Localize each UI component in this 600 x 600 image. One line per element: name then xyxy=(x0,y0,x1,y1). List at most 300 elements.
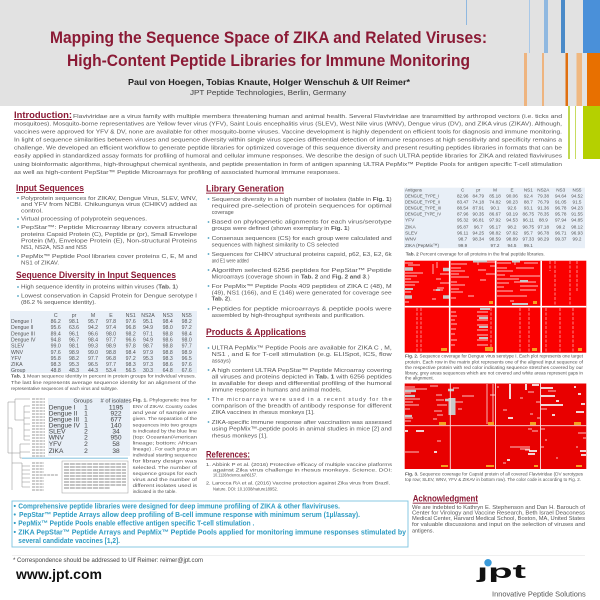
table 1: sequence identity: 98.0 xyxy=(182,338,192,344)
figure 1 caption: lineage; bottom: African xyxy=(133,441,197,447)
callout: conclusions: • xyxy=(14,501,16,510)
figure 1 caption: individual starting sequence xyxy=(133,453,197,459)
panel: library generation: (49), NS1 (166), and E (146) were generated for coverage see xyxy=(212,290,392,296)
table 2: percent coverage: 88.54 xyxy=(457,206,469,211)
table 1: sequence identity: 98.0 xyxy=(106,331,116,337)
figure 2 caption: the alignment. xyxy=(405,376,434,382)
table 1: sequence identity: Group xyxy=(11,368,26,374)
title xyxy=(50,29,487,70)
table 2: percent coverage: 94.64 xyxy=(555,193,567,198)
table 1: sequence identity: 98.8 xyxy=(163,344,173,350)
figure 1 caption: given. The separation of the xyxy=(133,416,197,422)
table: groups and isolates: Dengue III xyxy=(49,416,79,423)
table: groups and isolates: 34 xyxy=(112,428,120,435)
table: groups and isolates: 1 xyxy=(84,422,88,429)
table 1: sequence identity: M xyxy=(91,313,95,319)
table 1: sequence identity: NS5 xyxy=(182,313,192,319)
table 2: percent coverage: 98.59 xyxy=(489,236,501,241)
panel: products and applications: ZIKA-specific immune response after vaccination was assessed xyxy=(212,420,392,426)
table 1: sequence identity: 89.4 xyxy=(51,331,61,337)
panel: library generation: Algorithm selected 6256 peptides for PepStar™ Peptide xyxy=(212,268,392,274)
panel: library generation: Sequences for CHIKV structural proteins capsid, p62, E3, E2, 6k xyxy=(212,252,392,258)
table 1: sequence identity: 98.9 xyxy=(106,344,116,350)
table 2: percent coverage: E xyxy=(510,187,514,192)
table 1: sequence identity: 64.8 xyxy=(163,368,173,374)
figure 1 caption: for library design was xyxy=(133,459,198,465)
introduction: as well as high-content PepStar™ Peptide Microarrays for profiling of associated humoral immune responses. xyxy=(14,170,340,176)
table 1: sequence identity: 95.3 xyxy=(69,362,79,368)
panel: library generation: Tab. 2). xyxy=(212,297,232,303)
table 2: percent coverage: Antigens xyxy=(405,187,423,193)
table 2: percent coverage xyxy=(404,187,585,249)
figure 1 caption: lineage) . For each group an xyxy=(133,447,197,453)
panel: products and applications: rhesus monkeys [1]. xyxy=(212,433,268,439)
table 1 caption: Tab. 1 Mean sequence identity in percent in protein groups for individual viruses. xyxy=(11,374,196,380)
table 2: percent coverage: 93.1 xyxy=(524,206,533,211)
panel: input sequences: Virtual processing of polyprotein sequences. xyxy=(21,217,148,223)
table 1: sequence identity: 53.4 xyxy=(106,368,116,374)
table 2: percent coverage: 95.78 xyxy=(555,212,567,217)
table 1: sequence identity: 96.5 xyxy=(182,356,192,362)
table 1: sequence identity: 99.0 xyxy=(51,344,61,350)
table 1: sequence identity: 99.3 xyxy=(88,344,98,350)
table: groups and isolates: 2 xyxy=(84,434,88,441)
table 2: percent coverage: 96.78 xyxy=(538,230,549,235)
table 1: sequence identity: WNV xyxy=(11,350,24,356)
table 2: percent coverage: 90.06 xyxy=(506,193,518,198)
table 1: sequence identity: 96.8 xyxy=(106,356,116,362)
panel: acknowledgment: for valuable discussions and input on the selection of viruses and xyxy=(412,522,585,528)
table 1: sequence identity: 97.2 xyxy=(126,356,136,362)
panel: acknowledgment: We are indebted to Kathryn E. Stephenson and Dan H. Barouch of xyxy=(412,505,585,511)
tree legend box xyxy=(62,461,128,493)
table 2: percent coverage: 90.1 xyxy=(491,206,500,211)
table 2: percent coverage: 98.12 xyxy=(571,224,583,229)
table: groups and isolates xyxy=(48,398,132,456)
figure 3 caption: top row; SLEV, WNV, YFV & ZIKAV in bottom row). The color code is according to Fig. 2. xyxy=(405,477,581,483)
panel: references: 1. Abbink P et al. (2016) Protective efficacy of multiple vaccine platforms xyxy=(206,462,393,468)
table: groups and isolates: ZIKA xyxy=(49,448,64,455)
table 2: percent coverage: 99.2 xyxy=(573,236,582,241)
introduction: using bioinformatic algorithms, high-throughput chemical synthesis, and peptide presentation in form of antigen spanning ULTRA PepMix™ Peptide Pools for antigen specific T-cell stimulation xyxy=(14,162,562,168)
panel: acknowledgment xyxy=(412,494,585,534)
panel: input sequences: PepStar™: Peptide Microarray library covers structural xyxy=(21,225,197,231)
table: groups and isolates: # of isolates xyxy=(101,398,132,404)
panel: library generation: Consensus sequences (CS) for each group were calculated and xyxy=(212,236,392,242)
table 2: percent coverage: 98.34 xyxy=(473,236,484,241)
title: Mapping the Sequence Space of ZIKA and Related Viruses: xyxy=(50,29,487,47)
table 1: sequence identity: 98.3 xyxy=(163,356,173,362)
table 1: sequence identity: 96.8 xyxy=(126,325,136,331)
website url: www.jpt.com xyxy=(15,567,102,582)
table: groups and isolates: SLEV xyxy=(49,428,66,435)
table 2: percent coverage: YFV xyxy=(405,218,415,224)
figure 1 caption: sequence groups for each xyxy=(133,471,197,477)
table 1: sequence identity: 98.1 xyxy=(69,319,79,325)
callout: conclusions: PepStar™ Peptide Arrays allow deep profiling of B-cell immune response with minimum serum (1µl/assay). xyxy=(19,510,360,519)
table 1: sequence identity: 97.8 xyxy=(126,344,136,350)
panel: library generation: Sequence diversity in a high number of isolates (table in Fig. 1 ) xyxy=(212,197,392,203)
table 2: percent coverage: 88.9 xyxy=(539,218,548,223)
table 2: percent coverage: 99.2 xyxy=(556,224,566,229)
table 1: sequence identity: 98.8 xyxy=(163,350,173,356)
table 1: sequence identity: 96.5 xyxy=(88,362,98,368)
table: groups and isolates: Dengue II xyxy=(49,410,77,418)
introduction: vaccines were approved for YFV & DV, none are available for other mosquito-borne viruses. Vaccine development is highly dependent on efficient tools for diagnosis and immune monitoring. xyxy=(14,130,562,136)
table 1: sequence identity: Dengue IV xyxy=(11,338,36,344)
table 1: sequence identity: 98.8 xyxy=(106,350,116,356)
table 2: percent coverage: 91.36 xyxy=(538,206,549,211)
table 2: percent coverage: 98.82 xyxy=(489,230,501,235)
panel: acknowledgment: Medical Center, Harvard Medical School, Boston, MA, United States xyxy=(412,516,585,522)
table 1: sequence identity: 98.9 xyxy=(182,350,192,356)
introduction: mosquitoes). Mosquito-borne representatives are Yellow fever virus (YFV), Saint Louis encephalitis virus (SLEV), West Nile virus (WNV), Dengue virus (DV), and ZIKA virus (ZIKAV). Although, xyxy=(14,122,562,128)
table 2: percent coverage: 94.85 xyxy=(571,218,583,223)
panel: references xyxy=(206,450,393,492)
table 2: percent coverage: NS2A xyxy=(537,187,550,192)
table 1: sequence identity: 30.3 xyxy=(143,368,153,374)
table 1: sequence identity: 98.2 xyxy=(182,319,192,325)
table 1: sequence identity: NS1 xyxy=(126,313,136,319)
table 1: sequence identity: 98.4 xyxy=(163,319,173,325)
table 1: sequence identity: 98.2 xyxy=(126,331,136,337)
introduction: In light of sequence similarities between viruses and sequence diversity within single virus species differential detection of immune responses at high sensitivity and specificity remains a xyxy=(14,138,563,144)
figure 2 caption: library, grey areas sequences which are not covered and white areas represent gaps in xyxy=(405,370,583,376)
panel: products and applications: all viruses and proteins depicted in Tab. 1 with 6256 peptides xyxy=(212,374,392,380)
table 2: percent coverage: 94.53 xyxy=(506,218,518,223)
table 2: percent coverage: 98.75 xyxy=(523,224,534,229)
panel: products and applications: NS1 , and E for T-cell stimulation (e.g. ELISpot, ICS, flow xyxy=(212,352,393,358)
callout: conclusions: several candidate vaccines [1,2]. xyxy=(18,536,120,545)
panel: sequence diversity text: High sequence identity in proteins within viruses ( Tab. 1 ) xyxy=(21,285,178,291)
table 1: sequence identity: 97.1 xyxy=(143,331,153,337)
header band with colour stripes xyxy=(0,0,600,159)
table 2: percent coverage: NS1 xyxy=(524,187,533,192)
table 1: sequence identity: 97.7 xyxy=(88,356,98,362)
table 1: sequence identity: 48.3 xyxy=(69,368,79,374)
table 2: percent coverage: 85.18 xyxy=(489,193,501,198)
table 2: percent coverage: NS3 xyxy=(556,187,566,192)
table 1: sequence identity: ZIKA xyxy=(11,362,23,368)
table 2: percent coverage: 99.9 xyxy=(458,243,468,248)
table 2: percent coverage: DENGUE_TYPE_II xyxy=(405,199,440,205)
panel: references: against Zika virus challenge in rhesus monkeys. Science. DOI: xyxy=(213,467,392,473)
panel: references: 10.1126/science.aah6157. xyxy=(213,472,257,478)
panel: library generation: Microarrays (coverage shown in Tab. 2 and Fig. 2 and 3 .) xyxy=(212,274,370,280)
table 1: sequence identity: 98.9 xyxy=(69,350,79,356)
figure 1 caption: is indicated by the blue line xyxy=(133,428,197,434)
panel: input sequences: control. xyxy=(21,209,44,215)
table 1: sequence identity: NS3 xyxy=(163,313,173,319)
table 1: sequence identity: 98.4 xyxy=(88,338,98,344)
table 1: sequence identity: 98.2 xyxy=(69,356,79,362)
table 2: percent coverage: 95.17 xyxy=(489,224,501,229)
table 2: percent coverage: 96.7 xyxy=(474,224,483,229)
table 2: percent coverage: DENGUE_TYPE_I xyxy=(405,193,439,199)
chart: phylogenetic tree xyxy=(8,399,128,490)
figure 1 caption xyxy=(133,398,198,495)
logo: jpt: Innovative Peptide Solutions xyxy=(492,592,586,599)
figure 1 caption: (top: Oceanian/American xyxy=(133,434,197,440)
figure 2 caption: the respective protein with red color indicating sequence stretches covered by our xyxy=(405,365,583,371)
authors: Paul von Hoegen, Tobias Knaute, Holger Wenschuh & Ulf Reimer* xyxy=(128,77,411,87)
panel: references: References: xyxy=(206,450,250,460)
table 1: sequence identity: 95.3 xyxy=(143,356,153,362)
table 1: sequence identity: 97.2 xyxy=(182,325,192,331)
table 2: percent coverage: 90.23 xyxy=(506,199,518,204)
figure 3: capsid coverage matrix plots xyxy=(405,384,586,469)
table 2: percent coverage: 76.79 xyxy=(538,199,549,204)
table: groups and isolates: WNV xyxy=(49,434,65,441)
panel: acknowledgment: antigens. xyxy=(412,528,434,534)
table 2: percent coverage: 74.82 xyxy=(489,199,501,204)
table 2: percent coverage: 98.29 xyxy=(538,236,549,241)
table 2: percent coverage: M xyxy=(493,187,497,192)
panel: library generation: required pre-selection of protein sequences for optimal xyxy=(212,203,392,209)
figure 1 caption: and year of sample are xyxy=(133,410,197,416)
introduction: easily applied in standardized assay formats for profiling of humoral and cellular immune responses. We describe the design of such ULTRA peptide libraries for ZIKA and related flaviviruses xyxy=(14,154,562,160)
callout: conclusions: • xyxy=(14,527,16,536)
table 1: sequence identity: 98.6 xyxy=(163,338,173,344)
table 1 caption xyxy=(11,374,196,392)
table 2: percent coverage: 97.92 xyxy=(489,218,501,223)
table 2: percent coverage: 98.2 xyxy=(508,224,517,229)
panel: input sequences: NS1, NS2A, NS3 and NS5 xyxy=(21,245,87,251)
table 2: percent coverage: 90.35 xyxy=(473,212,484,217)
table 2: percent coverage: 79.38 xyxy=(538,193,549,198)
table 1 caption: representative sequences of each virus and subtype. xyxy=(11,386,118,392)
table 2: percent coverage: 92.6 xyxy=(508,206,517,211)
callout: conclusions: PepMix™ Peptide Pools enable effective antigen specific T-cell stimulation . xyxy=(18,519,254,528)
panel: sequence diversity text: Lowest conservation in Capsid Protein for Dengue serotype I xyxy=(21,294,198,300)
table 1: sequence identity: 97.9 xyxy=(143,350,153,356)
panel: products and applications: A high content ULTRA PepStar™ Peptide Microarray covering xyxy=(212,368,392,374)
table 2: percent coverage: 97.94 xyxy=(555,218,567,223)
panel: input sequences: NS1 of ZIKAV. xyxy=(21,261,59,267)
table 1: sequence identity: 95.7 xyxy=(88,319,98,325)
table 1: sequence identity: 98.0 xyxy=(163,325,173,331)
table: groups and isolates: Groups xyxy=(73,398,93,404)
figure 1 caption: sequences into two groups xyxy=(133,422,198,428)
table: groups and isolates: 922 xyxy=(110,410,122,418)
table 2: percent coverage: 97.62 xyxy=(506,230,518,235)
table 2: percent coverage: 78.35 xyxy=(538,212,549,217)
table 2: percent coverage: 91.55 xyxy=(571,212,583,217)
table 2: percent coverage: 96.11 xyxy=(523,218,534,223)
figure 2 caption xyxy=(405,353,584,382)
callout: conclusions: • xyxy=(14,510,16,519)
table 2: percent coverage: SLEV xyxy=(405,230,418,236)
figure 1 caption: different isolates used is xyxy=(133,483,198,489)
table 2: percent coverage: 84.79 xyxy=(473,193,484,198)
table 1: sequence identity: Dengue I xyxy=(11,319,32,325)
table 1: sequence identity: 94.9 xyxy=(143,338,153,344)
panel: references: Nature. DOI: 10.1038/nature18952. xyxy=(213,486,278,492)
figure 1 caption: Fig. 1. Phylogenetic tree for xyxy=(133,398,197,404)
panel: acknowledgment: Acknowledgment xyxy=(413,494,478,504)
table 1: sequence identity: 97.7 xyxy=(182,344,192,350)
table 2: percent coverage: ZIKA xyxy=(405,224,416,230)
table 1: sequence identity: 97.6 xyxy=(182,362,192,368)
table 1: sequence identity: NS2A xyxy=(141,313,155,319)
table 1: sequence identity: 97.7 xyxy=(106,338,116,344)
panel: products and applications: using PepMix™-peptide pools in animal studies in mice [2] and xyxy=(212,427,392,433)
table 1: sequence identity: 96.7 xyxy=(69,338,79,344)
table 2: percent coverage: WNV xyxy=(405,236,417,242)
logo: jpt xyxy=(475,559,586,599)
figure 1 caption: ENV of ZIKAV. Country codes xyxy=(133,404,198,410)
table 1: sequence identity: 98.6 xyxy=(163,362,173,368)
panel: library generation: groups were defined (shown exemplary in Fig. 1 ) xyxy=(212,226,350,232)
table 1: sequence identity: C xyxy=(54,313,58,319)
panel: references: 2. Larocca RA et al. (2016) Vaccine protection against Zika virus from Brazil. xyxy=(206,481,390,487)
table 1: sequence identity: 98.3 xyxy=(51,362,61,368)
table 2: percent coverage: 98.7 xyxy=(458,236,468,241)
table 2: percent coverage: 87.96 xyxy=(457,212,469,217)
table 2: percent coverage: pr xyxy=(476,187,481,192)
table 2: percent coverage: 86.75 xyxy=(523,212,534,217)
table 2: percent coverage: 94.52 xyxy=(571,193,583,198)
table 2: percent coverage: 93.19 xyxy=(506,212,518,217)
table: groups and isolates: 58 xyxy=(112,441,120,448)
panel: acknowledgment: Center for Virology and Vaccine Research, Beth Israel Deaconess xyxy=(412,511,585,517)
table: groups and isolates: 1195 xyxy=(109,404,123,411)
table: groups and isolates: 1 xyxy=(84,404,88,411)
table 1: sequence identity xyxy=(10,311,197,374)
table 1: sequence identity: 67.6 xyxy=(182,368,192,374)
panel: library generation: coverage xyxy=(212,210,234,216)
table 1: sequence identity: 97.8 xyxy=(106,319,116,325)
panel: library generation: sequences with highest similarity to CS selected xyxy=(212,242,339,248)
panel: sequence diversity text: (86.2 % sequence identity). xyxy=(21,300,96,306)
table 1 caption: The last line represents average sequence identity for an alignment of the xyxy=(11,380,196,386)
table 1: sequence identity: 97.3 xyxy=(143,362,153,368)
table 1: sequence identity: pr xyxy=(72,313,77,319)
table 1: sequence identity: 97.4 xyxy=(106,325,116,331)
table: groups and isolates: Dengue IV xyxy=(49,422,80,429)
callout: conclusions xyxy=(12,501,408,547)
table 2: percent coverage: 95.87 xyxy=(457,224,469,229)
table 1: sequence identity: 94.2 xyxy=(88,325,98,331)
table 2: percent coverage: 92.4 xyxy=(524,193,533,198)
figure 1 caption: virus and the number of xyxy=(133,477,198,483)
title: High-Content Peptide Libraries for Immune Monitoring xyxy=(67,52,470,70)
panel: input sequences xyxy=(16,183,198,267)
panel: input sequences: Polyprotein sequences for ZIKAV, Dengue Virus, SLEV, WNV, xyxy=(21,196,198,202)
table: groups and isolates: 677 xyxy=(110,416,122,423)
figure 3 caption xyxy=(405,472,584,483)
introduction: challenge. We developed an efficient workflow to generate peptide libraries for optimized coverage of this sequence diversity and present resulting peptides libraries in formats that can be xyxy=(14,146,562,152)
table 2: percent coverage: 86.67 xyxy=(489,212,501,217)
table 1: sequence identity: 97.7 xyxy=(106,362,116,368)
affiliation: JPT Peptide Technologies, Berlin, Germany xyxy=(190,88,346,97)
callout: conclusions: Comprehensive peptide libraries were designed for deep immune profiling of ZIKA & other flaviviruses. xyxy=(18,501,340,510)
callout: conclusions: ZIKA PepStar™ Peptide Arrays and PepMix™ Peptide Pools applied for monitoring immune responses stimulated by xyxy=(18,527,406,536)
table 1: sequence identity: Dengue II xyxy=(11,325,34,331)
panel: input sequences: Protein (M), Envelope Protein (E), Non-structural Proteins xyxy=(21,238,197,244)
table 1: sequence identity: YFV xyxy=(11,356,22,362)
table 2: percent coverage: 94.5 xyxy=(508,243,517,248)
table 2: percent coverage: 97.18 xyxy=(538,224,549,229)
table 2: percent coverage: 97.2 xyxy=(491,243,500,248)
table 2: percent coverage: 99.37 xyxy=(555,236,567,241)
table: groups and isolates: Dengue I xyxy=(49,404,76,411)
table 1: sequence identity: 86.2 xyxy=(51,319,61,325)
table: groups and isolates: 950 xyxy=(110,434,122,441)
table 2: percent coverage: 83.47 xyxy=(457,199,469,204)
panel: library generation: Library Generation xyxy=(206,184,284,194)
table 2: percent coverage: 88.7 xyxy=(524,199,533,204)
table 1: sequence identity: 98.4 xyxy=(182,331,192,337)
table 1: sequence identity: 95.6 xyxy=(51,325,61,331)
introduction xyxy=(14,110,563,176)
panel: input sequences: proteins Capsid Protein (C), Peptide pr (pr), Small Envelope xyxy=(21,232,197,238)
table 2: percent coverage: 74.18 xyxy=(473,199,484,204)
table 1: sequence identity: 98.1 xyxy=(69,344,79,350)
table 2: percent coverage: DENGUE_TYPE_IV xyxy=(405,212,442,218)
table 1: sequence identity: 98.4 xyxy=(126,350,136,356)
table 2: percent coverage: 94.25 xyxy=(473,230,484,235)
table 1: sequence identity: 99.0 xyxy=(88,350,98,356)
table: groups and isolates: 1 xyxy=(84,410,88,418)
table 2: percent coverage: DENGUE_TYPE_III xyxy=(405,206,441,212)
panel: sequence diversity text: Sequence Diversity in Input Sequences xyxy=(16,270,176,280)
table 2 caption: Tab. 2 Percent coverage for all proteins in the final peptide libraries. xyxy=(406,252,545,258)
table 2: percent coverage: 98.89 xyxy=(506,236,518,241)
panel: library generation xyxy=(206,184,392,319)
figure 3 caption: Fig. 3. Sequence coverage for Capsid protein of all covered Flaviviridae (DV serotypes xyxy=(405,472,584,478)
table 2: percent coverage: 99.1 xyxy=(524,243,533,248)
table 1: sequence identity: 97.6 xyxy=(126,319,136,325)
introduction: Introduction: xyxy=(14,110,72,120)
correspondence note: * Correspondence should be addressed to Ulf Reimer: reimer@jpt.com xyxy=(13,557,203,564)
table: groups and isolates: 2 xyxy=(84,428,88,435)
panel: library generation: and E1 were added xyxy=(212,258,249,264)
table 1: sequence identity: 44.3 xyxy=(88,368,98,374)
callout: conclusions: • xyxy=(14,519,16,528)
table 1: sequence identity: 96.1 xyxy=(69,331,79,337)
table 1: sequence identity: 98.3 xyxy=(126,362,136,368)
logo: jpt: ȷpt xyxy=(475,562,527,583)
table 2: percent coverage: 96.11 xyxy=(457,230,469,235)
table 2: percent coverage: 91.05 xyxy=(555,199,567,204)
table 2: percent coverage: 97.33 xyxy=(523,236,534,241)
figure 2 caption: protein. Each row in the matrix plot represents one of the aligned input sequence of xyxy=(405,360,584,366)
table: groups and isolates: 2 xyxy=(84,441,88,448)
table 2: percent coverage: NS5 xyxy=(573,187,582,192)
panel: products and applications: ULTRA PepMix™ Peptide Pools are available for ZIKA C , M, xyxy=(212,346,392,352)
panel: library generation: Peptides for peptide microarrays & peptide pools were xyxy=(212,307,392,313)
figure 1 caption: selected. The number of xyxy=(133,465,198,471)
table 1: sequence identity: 94.8 xyxy=(51,338,61,344)
table 1: sequence identity: SLEV xyxy=(11,344,25,350)
table 1: sequence identity: 56.5 xyxy=(126,368,136,374)
panel: products and applications: ZIKA vaccines in rhesus monkeys [1]. xyxy=(212,410,315,416)
table 1: sequence identity: 63.6 xyxy=(69,325,79,331)
panel: library generation: Based on phylogenetic alignments for each virus/serotype xyxy=(212,220,392,226)
panel: input sequences: Input Sequences xyxy=(16,183,84,193)
table 2: percent coverage: 94.23 xyxy=(571,206,583,211)
table 2: percent coverage: 96.81 xyxy=(473,218,484,223)
table 1: sequence identity: 98.7 xyxy=(143,344,153,350)
panel: sequence diversity text xyxy=(16,270,198,306)
table 1: sequence identity: 96.6 xyxy=(126,338,136,344)
table 1: sequence identity: E xyxy=(109,313,113,319)
panel: input sequences: and YFV from NCBI. Chikungunya virus (CHIKV) added as xyxy=(21,202,197,208)
panel: products and applications: is available for deep and differential profiling of the humoral xyxy=(212,381,392,387)
table 2: percent coverage: 95.7 xyxy=(524,230,533,235)
panel: library generation: For PepMix™ Peptide Pools 409 peptides of ZIKA C (48), M xyxy=(212,284,392,290)
